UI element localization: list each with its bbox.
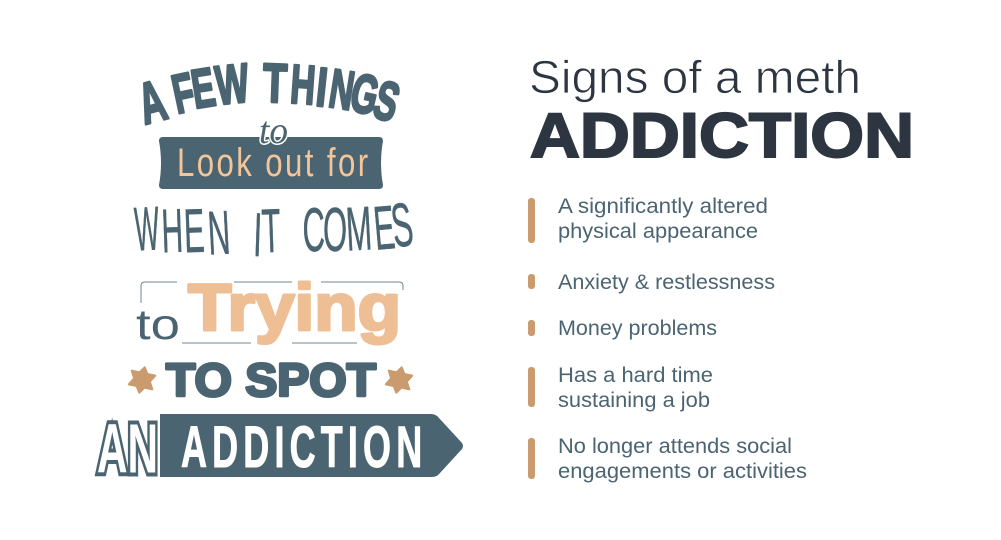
heading: A few things: W	[212, 51, 252, 116]
list item: money problems: Money problems	[558, 317, 717, 340]
heading: when it comes	[133, 191, 417, 270]
icon: left star	[128, 365, 156, 395]
heading: A few things: I	[313, 57, 330, 119]
heading: addiction: ADDICTION	[530, 101, 914, 171]
list item: social engagements	[528, 435, 807, 483]
banner: an addiction: AN	[97, 410, 158, 488]
heading: A few things: T	[262, 53, 288, 115]
word: to: to	[136, 301, 180, 349]
thin frame around trying	[141, 282, 403, 343]
panel: left typographic lockup	[97, 51, 463, 487]
heading: when it comes: C	[302, 196, 325, 265]
list item: social engagements: No longer attends social	[558, 435, 792, 458]
list item: physical appearance: A significantly altered	[558, 195, 768, 218]
list item: physical appearance: physical appearance	[558, 220, 758, 243]
word: to spot: TO SPOT	[166, 354, 376, 406]
heading: A few things: F	[167, 61, 200, 125]
heading: A few things: S	[367, 69, 406, 134]
list item: sustaining a job: sustaining a job	[558, 389, 710, 412]
heading: A few things: G	[345, 61, 385, 127]
heading: A few things: N	[325, 57, 358, 122]
heading: when it comes: S	[387, 191, 417, 261]
heading: A few things: E	[187, 56, 219, 120]
heading: when it comes: W	[133, 195, 161, 265]
banner: an addiction: ADDICTION	[181, 415, 422, 480]
heading: A few things	[131, 51, 406, 137]
script word: to: to	[259, 110, 288, 152]
heading: signs of a meth: Signs of a meth	[529, 51, 861, 103]
panel: signs list	[528, 51, 914, 483]
heading: when it comes: H	[160, 197, 184, 266]
heading: A few things: A	[131, 68, 173, 137]
banner: an addiction	[97, 410, 463, 488]
heading: when it comes: M	[344, 195, 374, 265]
list item: anxiety: Anxiety & restlessness	[558, 271, 775, 294]
list item: sustaining a job: Has a hard time	[558, 364, 713, 387]
icon: right star	[385, 365, 413, 395]
heading: when it comes: T	[261, 197, 282, 266]
heading: when it comes: I	[252, 201, 263, 270]
heading: when it comes: O	[323, 197, 347, 265]
heading: when it comes: E	[183, 197, 206, 266]
heading: A few things: H	[288, 53, 317, 116]
word: trying: Trying	[188, 270, 401, 344]
banner: look out for: Look out for	[177, 140, 368, 185]
list item: social engagements: engagements or activities	[558, 460, 807, 483]
list item: sustaining a job	[528, 364, 713, 412]
heading: when it comes: N	[206, 199, 232, 268]
list item: physical appearance	[528, 195, 768, 243]
heading: when it comes: E	[371, 194, 398, 264]
